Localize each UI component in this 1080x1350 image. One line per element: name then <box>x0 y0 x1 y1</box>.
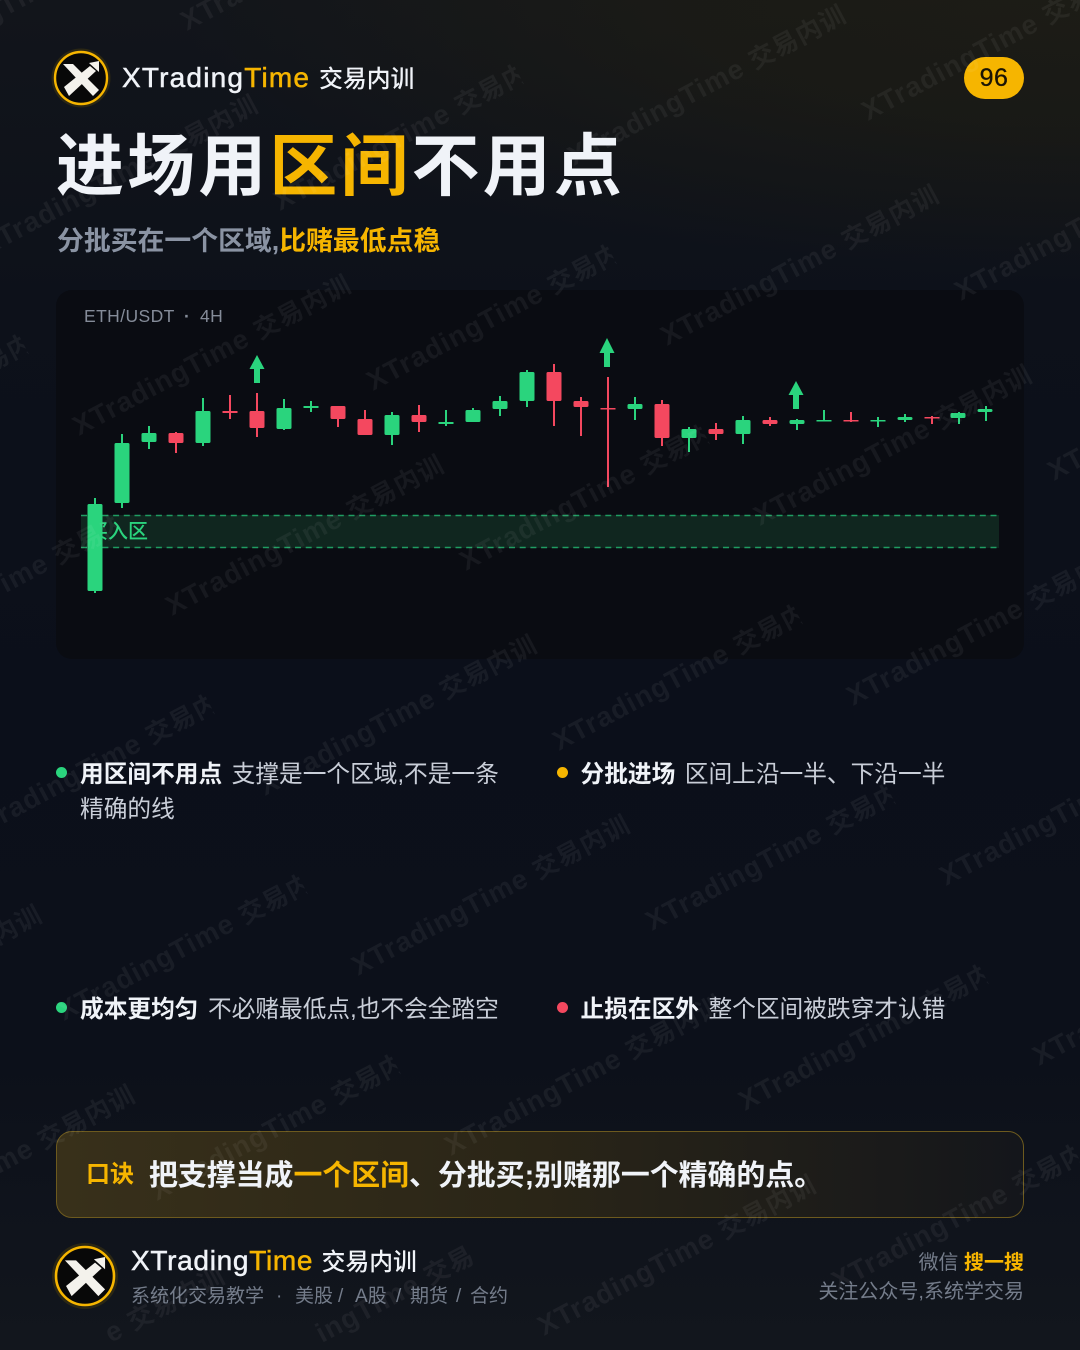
bullet: use a zone: 用区间不用点 支撑是一个区域,不是一条 <box>80 762 499 788</box>
callout text: 把支撑当成一个区间、分批买;别赌那一个精确的点。 <box>149 1160 823 1192</box>
footer logo <box>52 1243 118 1309</box>
footer tagline: 美股 <box>295 1286 333 1307</box>
chart pair label: 4H <box>200 306 223 326</box>
issue number badge <box>964 57 1024 99</box>
issue number badge: 96 <box>980 64 1008 92</box>
footer tagline: / <box>338 1286 343 1307</box>
watermark layer: XTradingTime 交易内训 <box>268 43 557 216</box>
watermark layer: XTradingTime 交易内训 <box>52 853 341 1026</box>
header logo <box>52 48 110 108</box>
red candles <box>168 364 940 487</box>
watermark layer: XTradingTime 交易内训 <box>748 358 1037 531</box>
chart pair label: · <box>184 306 190 326</box>
callout: mnemonic <box>56 1131 1024 1218</box>
footer tagline: 系统化交易教学 <box>131 1286 264 1307</box>
green candles <box>88 370 992 593</box>
bullet: use a zone <box>56 762 499 823</box>
footer tagline <box>131 1286 508 1307</box>
buy zone band <box>81 515 999 548</box>
watermark layer: XTradingTime 交易内训 <box>361 223 650 396</box>
footer brand name: XTradingTime 交易内训 <box>131 1245 417 1276</box>
arrow: up signal at right side <box>788 381 804 409</box>
chart pair label <box>84 306 223 326</box>
footer tagline: 合约 <box>470 1286 508 1307</box>
footer call to action: 微信 搜一搜 <box>918 1252 1024 1274</box>
footer tagline: / <box>396 1286 401 1307</box>
watermark layer: XTradingTime 交易内训 <box>67 268 356 441</box>
chart pair label: ETH/USDT <box>84 306 175 326</box>
watermark layer: XTradingTime 交易内训 <box>640 763 929 936</box>
watermark layer: e 交易内训 <box>99 1259 230 1348</box>
bullet: stop outside zone: 止损在区外 整个区间被跌穿才认错 <box>580 997 945 1023</box>
watermark layer: XTradingTime 交易内训 <box>439 988 728 1161</box>
footer tagline: · <box>276 1286 282 1307</box>
bullet: average cost: 成本更均匀 不必赌最低点,也不会全踏空 <box>80 997 499 1023</box>
header brand name: XTradingTime 交易内训 <box>122 62 414 93</box>
subtitle: 分批买在一个区域,比赌最低点稳 <box>57 226 440 256</box>
bullet: use a zone: 精确的线 <box>80 797 175 823</box>
arrow: up signal at first candle <box>250 355 264 383</box>
watermark layer: XTradingTime 交易内训 <box>547 583 836 756</box>
watermark layer: XTradingTime 交易内训 <box>160 448 449 621</box>
watermark layer: XTradingTime 交易内训 <box>562 0 851 171</box>
watermark layer: XTradingTime 交易内训 <box>346 808 635 981</box>
watermark layer: XTradingTime 交易内训 <box>733 943 1022 1116</box>
footer tagline: 期货 <box>410 1286 448 1307</box>
bullet: scale in: 分批进场 区间上沿一半、下沿一半 <box>580 762 945 788</box>
watermark layer: XTradingTime 交易内训 <box>532 1168 821 1341</box>
title: 进场用区间不用点 <box>56 111 625 210</box>
arrow: up signal at long wick <box>600 338 614 367</box>
callout label: 口诀 <box>86 1161 134 1188</box>
watermark layer: XTradingTime 交易内训 <box>145 1033 434 1206</box>
watermark layer: XTradingTime 交易内训 <box>655 178 944 351</box>
watermark layer: ingTime 交易 <box>310 1239 479 1348</box>
buy zone band: 买入区 <box>88 515 148 544</box>
watermark layer: XTradingTime 交易内训 <box>454 403 743 576</box>
footer tagline: / <box>456 1286 461 1307</box>
watermark layer: XTradingTime 交易内训 <box>253 628 542 801</box>
footer tagline: A股 <box>355 1286 387 1307</box>
footer note: 关注公众号,系统学交易 <box>818 1281 1024 1303</box>
